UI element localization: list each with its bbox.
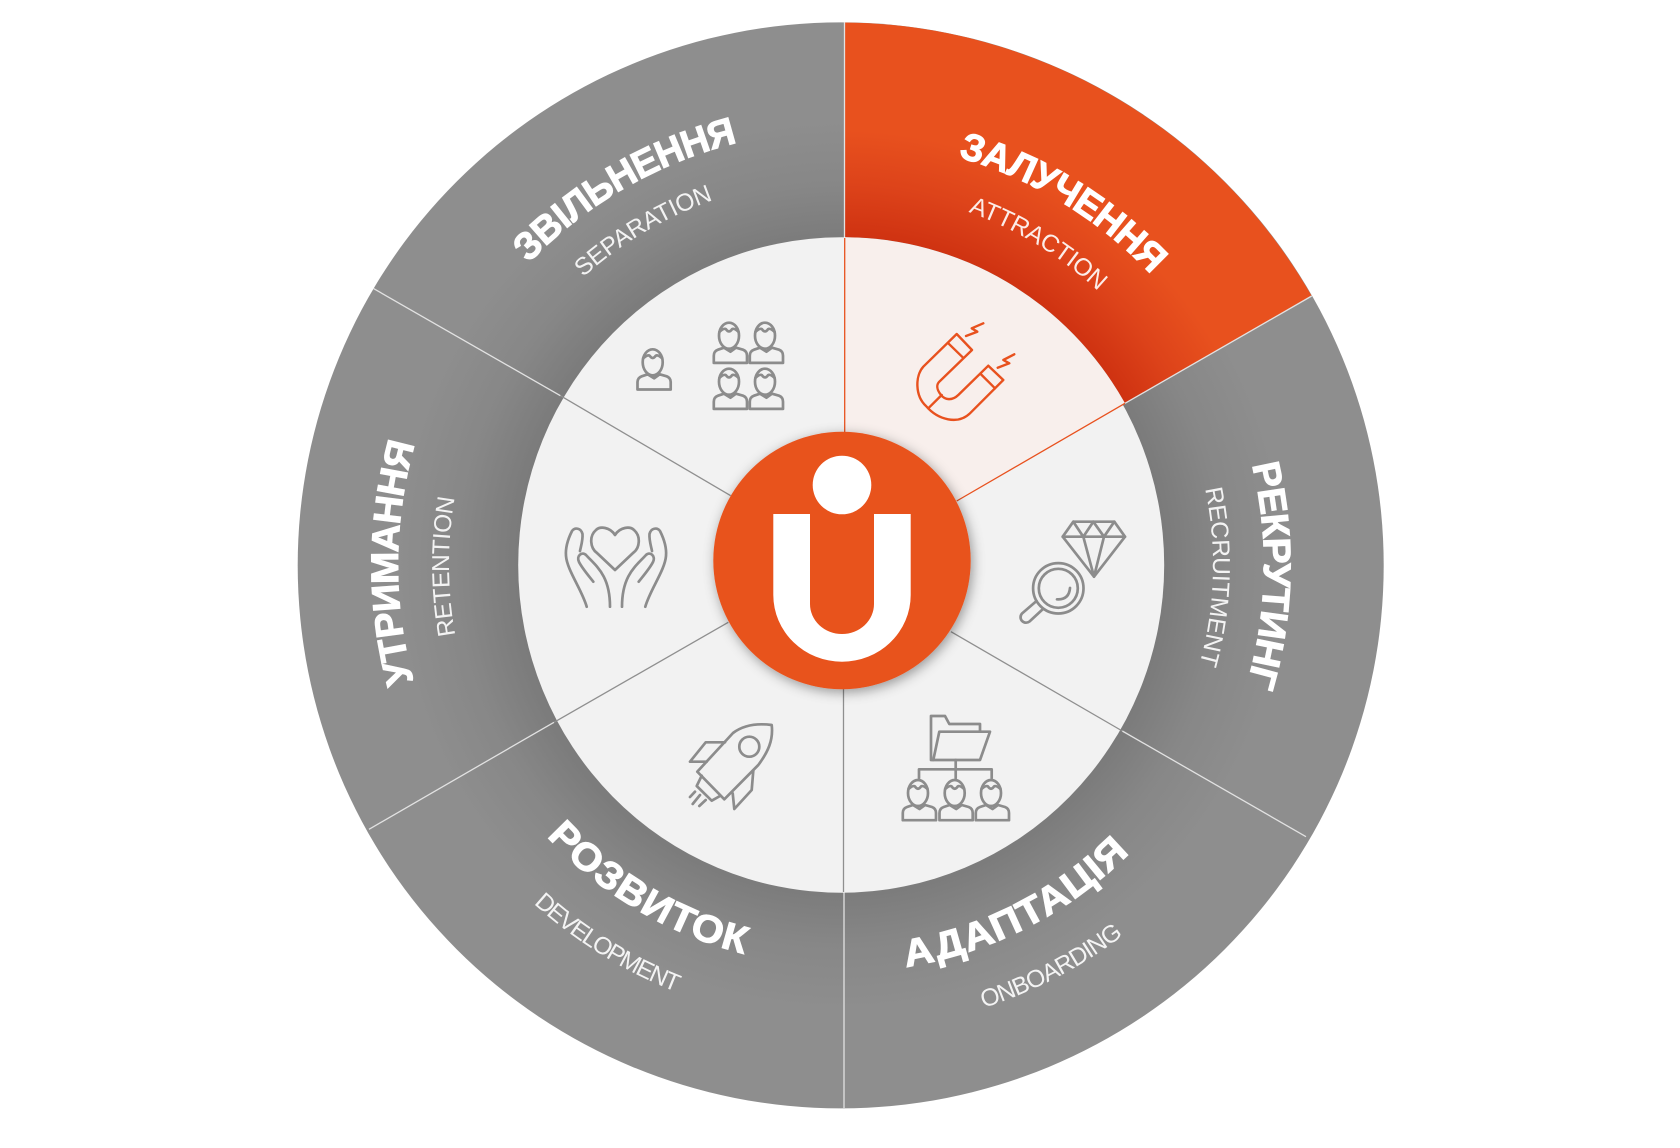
inner peach sector: attraction	[844, 237, 1125, 501]
label: retention	[370, 440, 455, 689]
label: development: DEVELOPMENT	[535, 892, 682, 990]
icon: folder with team hierarchy	[903, 716, 1009, 820]
icon: diamond and magnifier	[1021, 522, 1125, 623]
ring divider lines	[369, 22, 1312, 1108]
icon: hands holding heart	[566, 528, 666, 607]
label: separation: ЗВІЛЬНЕННЯ	[514, 117, 736, 260]
outer ring: orange attraction sector	[844, 22, 1312, 403]
label: onboarding: АДАПТАЦІЯ	[906, 835, 1128, 969]
inner divider lines	[554, 238, 1125, 892]
icon: rocket	[690, 724, 772, 809]
label: retention: УТРИМАННЯ	[370, 440, 415, 689]
label: onboarding: ONBOARDING	[981, 924, 1120, 1006]
label: recruitment: RECRUITMENT	[1201, 488, 1230, 668]
inner disc	[518, 237, 1164, 893]
label: retention: RETENTION	[432, 497, 455, 636]
label: recruitment: РЕКРУТИНГ	[1250, 461, 1292, 692]
label: development: РОЗВИТОК	[548, 819, 752, 955]
outer ring: grey disc	[298, 22, 1384, 1108]
label: attraction: ATTRACTION	[968, 198, 1108, 290]
label: separation: SEPARATION	[575, 184, 712, 274]
icon: one person separated from team	[638, 323, 783, 409]
center logo	[713, 432, 971, 689]
label: recruitment	[1201, 461, 1292, 692]
icon: magnet	[917, 323, 1014, 420]
label: attraction: ЗАЛУЧЕННЯ	[960, 134, 1169, 274]
